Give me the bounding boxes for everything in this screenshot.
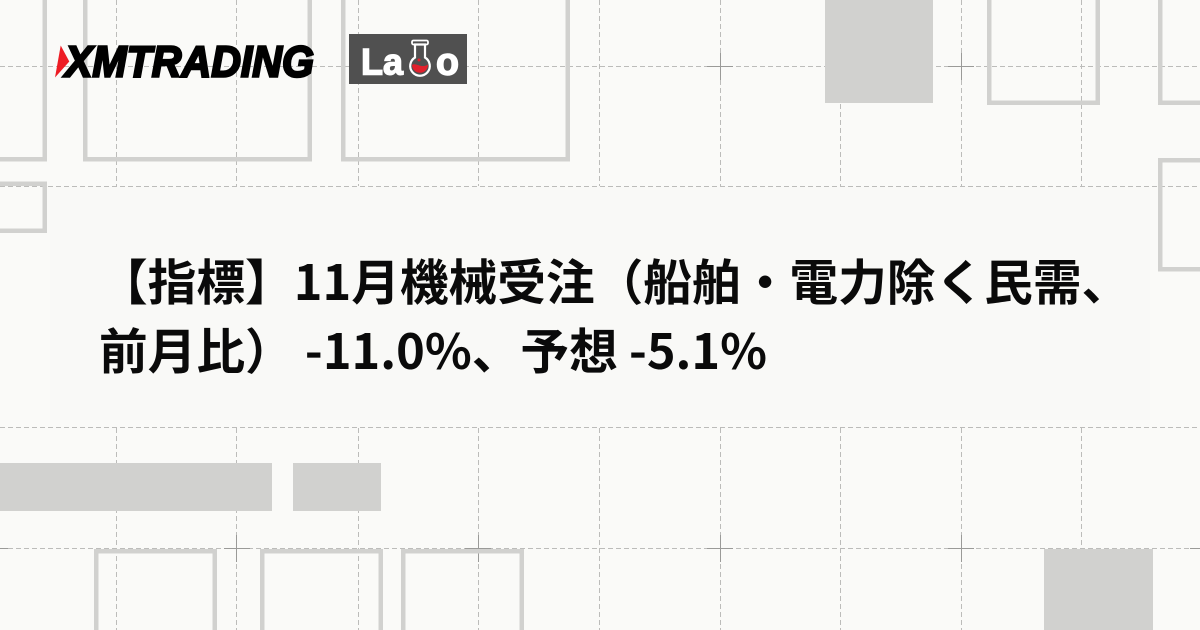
title: 【指標】11月機械受注（船舶・電力除く民需、 (99, 245, 1130, 315)
title (99, 245, 1130, 384)
icon: red XM arrow (55, 46, 69, 78)
logo letter o: o (436, 42, 459, 84)
logo letters La: La (361, 42, 403, 82)
title: 前月比） -11.0%、予想 -5.1% (99, 314, 767, 384)
logo: XMTRADING (55, 38, 314, 84)
icon: flask (410, 40, 430, 76)
logo: Lab (349, 34, 467, 84)
